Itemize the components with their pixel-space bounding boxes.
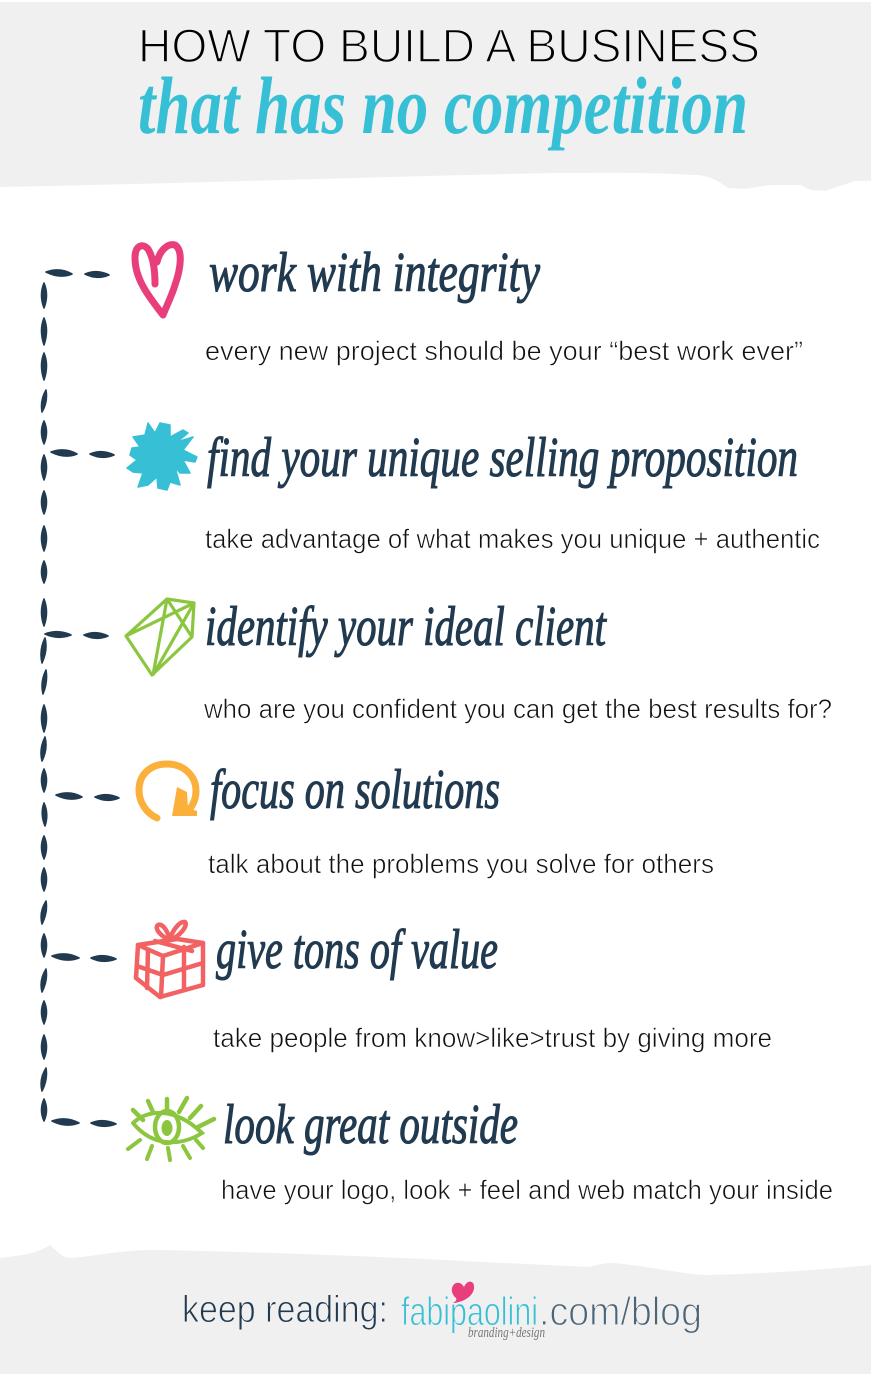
panel: footer band bbox=[0, 1245, 871, 1374]
description: take advantage of what makes you unique + authentic bbox=[205, 524, 820, 554]
heading: identify your ideal client bbox=[205, 596, 607, 658]
item 1: work with integrity bbox=[135, 242, 803, 366]
footer call to action bbox=[182, 1282, 702, 1341]
heading: focus on solutions bbox=[210, 759, 500, 821]
url text: com/blog: .com/blog bbox=[539, 1290, 702, 1334]
item 3: identify your ideal client bbox=[126, 596, 832, 724]
description: who are you confident you can get the best results for? bbox=[203, 694, 832, 724]
description: have your logo, look + feel and web match your inside bbox=[221, 1175, 833, 1205]
icon: gift box bbox=[136, 922, 203, 997]
heading: look great outside bbox=[223, 1094, 518, 1156]
panel: header band bbox=[0, 2, 871, 191]
dashed connector line bbox=[41, 270, 119, 1126]
item 6: look great outside bbox=[128, 1094, 833, 1205]
title: how to build a business: HOW TO BUILD A BUSINESS bbox=[138, 19, 760, 72]
heading: give tons of value bbox=[216, 919, 498, 981]
item 2: find your unique selling proposition bbox=[127, 423, 820, 554]
description: every new project should be your “best work ever” bbox=[205, 336, 803, 366]
icon: heart bbox=[135, 245, 180, 315]
logo text: fabipaolini: fabipaolini bbox=[401, 1290, 538, 1334]
logo heart icon bbox=[452, 1282, 474, 1303]
keep reading label: keep reading: bbox=[182, 1289, 388, 1331]
item 4: focus on solutions bbox=[139, 759, 714, 879]
icon: burst bbox=[127, 423, 197, 490]
description: take people from know>like>trust by giving more bbox=[213, 1023, 772, 1053]
logo tagline: branding+design bbox=[468, 1325, 545, 1341]
icon: circular arrow bbox=[139, 764, 197, 818]
description: talk about the problems you solve for others bbox=[208, 849, 714, 879]
icon: eye bbox=[128, 1098, 214, 1160]
heading: work with integrity bbox=[209, 242, 540, 304]
icon: gem bbox=[126, 599, 194, 675]
item 5: give tons of value bbox=[136, 919, 772, 1053]
